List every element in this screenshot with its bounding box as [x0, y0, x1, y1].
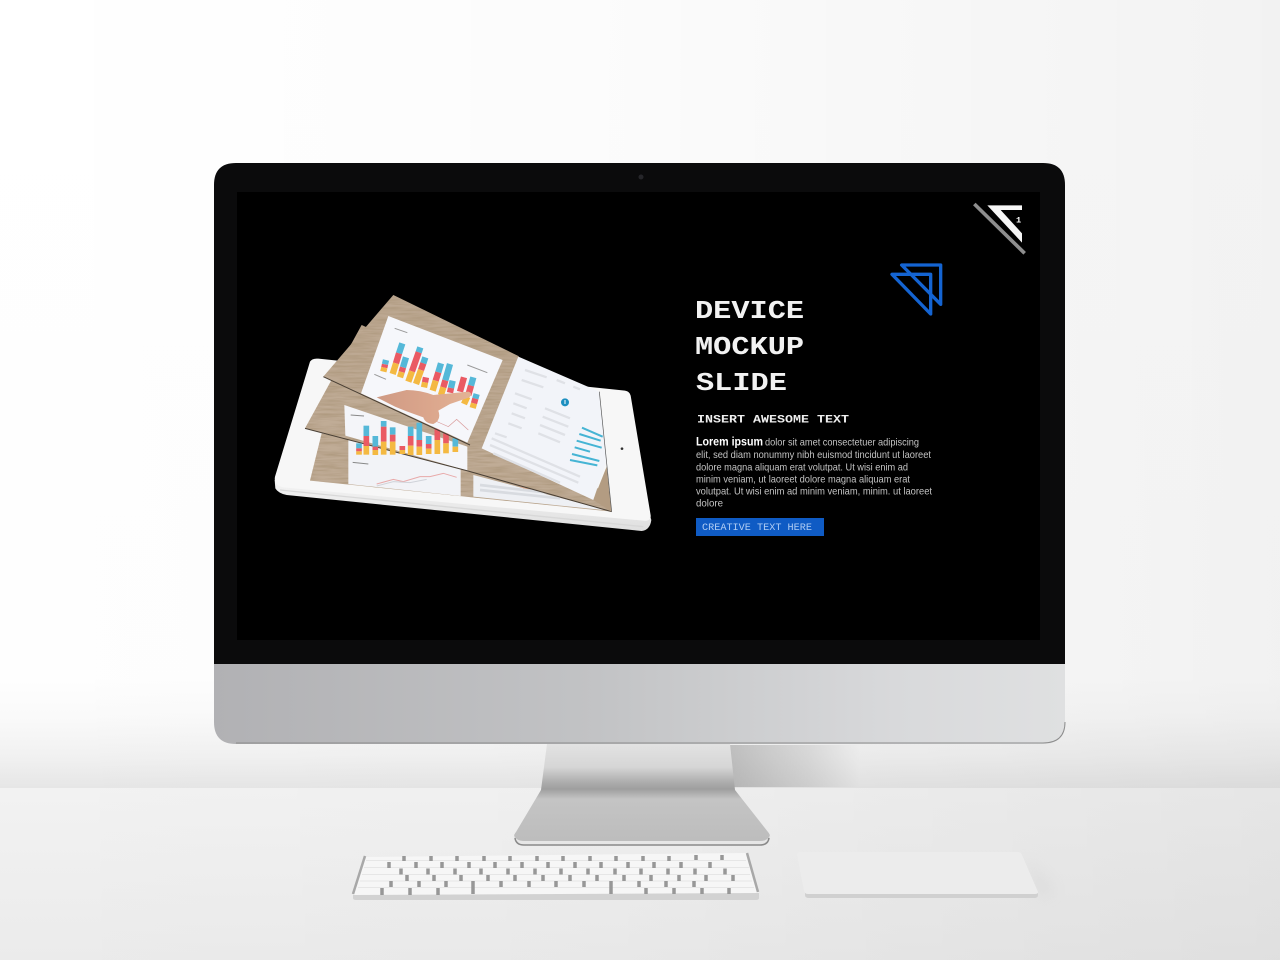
button: creative text here	[696, 518, 824, 536]
title: MOCKUP	[695, 334, 804, 362]
trackpad	[797, 852, 1055, 898]
keyboard	[353, 853, 759, 900]
top document sheet	[323, 295, 612, 512]
webcam	[638, 174, 644, 180]
monitor stand	[514, 744, 770, 845]
monitor chin	[214, 660, 1065, 744]
title: SLIDE	[696, 370, 787, 398]
body text block: volutpat. Ut wisi enim ad minim veniam, minim. ut laoreet	[696, 486, 932, 498]
body text block	[696, 436, 932, 510]
body text block: dolor sit amet consectetuer adipiscing	[765, 438, 919, 448]
button: creative text here: CREATIVE TEXT HERE	[702, 523, 812, 534]
report page	[482, 357, 607, 500]
title: DEVICE	[695, 298, 804, 326]
hand pointing	[377, 390, 471, 424]
icon: blue double triangle	[892, 265, 941, 314]
body text block: minim veniam, ut laoreet dolore magna aliquam erat	[696, 474, 910, 486]
bar chart: top sheet	[383, 343, 477, 408]
corner logo with page number: 1	[1016, 215, 1021, 225]
tablet body	[275, 359, 651, 531]
keyboard keys	[382, 855, 733, 895]
body text block: dolore	[696, 498, 723, 510]
body text block: elit, sed diam nonummy nibh euismod tincidunt ut laoreet	[696, 450, 931, 461]
monitor bezel	[214, 163, 1065, 664]
subtitle: INSERT AWESOME TEXT	[697, 413, 850, 426]
body text block: Lorem ipsum	[696, 436, 763, 448]
tablet illustration	[275, 295, 651, 531]
body text block: dolore magna aliquam erat volutpat. Ut wisi enim ad	[696, 462, 908, 474]
lower document sheet	[310, 433, 612, 512]
bar chart: middle sheet	[359, 421, 455, 455]
screen	[237, 192, 1040, 640]
title	[695, 298, 804, 398]
middle document sheet	[305, 325, 612, 512]
corner logo with page number	[974, 204, 1025, 253]
monitor	[214, 163, 1065, 744]
